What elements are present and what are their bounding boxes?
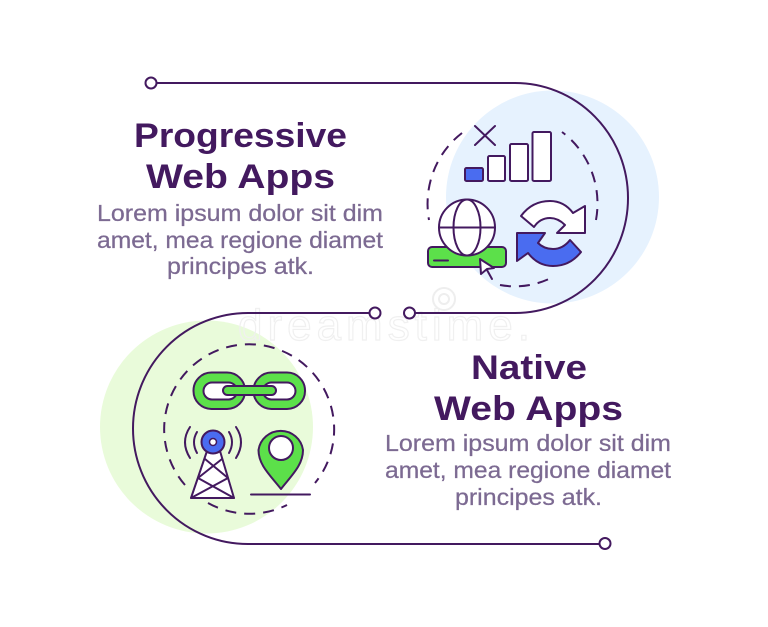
icon: radio tower: [185, 427, 241, 498]
icon: refresh arrows: [517, 201, 585, 266]
icon: location pin: [251, 431, 310, 494]
dashed ring: bottom icon group: [164, 344, 334, 514]
heading: Progressive Web Apps: Web Apps: [146, 158, 335, 196]
watermark: dreamstime.: [238, 301, 530, 350]
text block: Progressive Web Apps description: Lorem ipsum dolor sit dim: [97, 200, 383, 226]
icon: globe with address bar and cursor: [428, 200, 506, 279]
connector line: top section: [146, 78, 628, 318]
heading: Native Web Apps: Web Apps: [434, 390, 623, 428]
connector line: bottom section: [133, 308, 610, 549]
text block: Native Web Apps description: principes atk.: [455, 484, 602, 510]
background circle: blue: [446, 90, 659, 304]
text block: Progressive Web Apps description: [97, 200, 384, 279]
text block: Progressive Web Apps description: amet, mea regione diamet: [97, 227, 384, 253]
heading: Progressive Web Apps: Progressive: [134, 117, 347, 155]
text block: Native Web Apps description: amet, mea regione diamet: [385, 457, 672, 483]
heading: Native Web Apps: [434, 349, 623, 428]
icon: signal bars: [465, 132, 551, 181]
text block: Native Web Apps description: Lorem ipsum dolor sit dim: [385, 430, 671, 456]
icon: no signal cross: [475, 126, 495, 145]
text block: Native Web Apps description: [385, 430, 672, 510]
heading: Native Web Apps: Native: [471, 349, 587, 387]
background circle: green: [100, 320, 313, 534]
icon: chain link: [194, 372, 305, 409]
text block: Progressive Web Apps description: principes atk.: [167, 253, 314, 279]
heading: Progressive Web Apps: [134, 117, 347, 196]
dashed ring: top icon group: [428, 132, 598, 286]
